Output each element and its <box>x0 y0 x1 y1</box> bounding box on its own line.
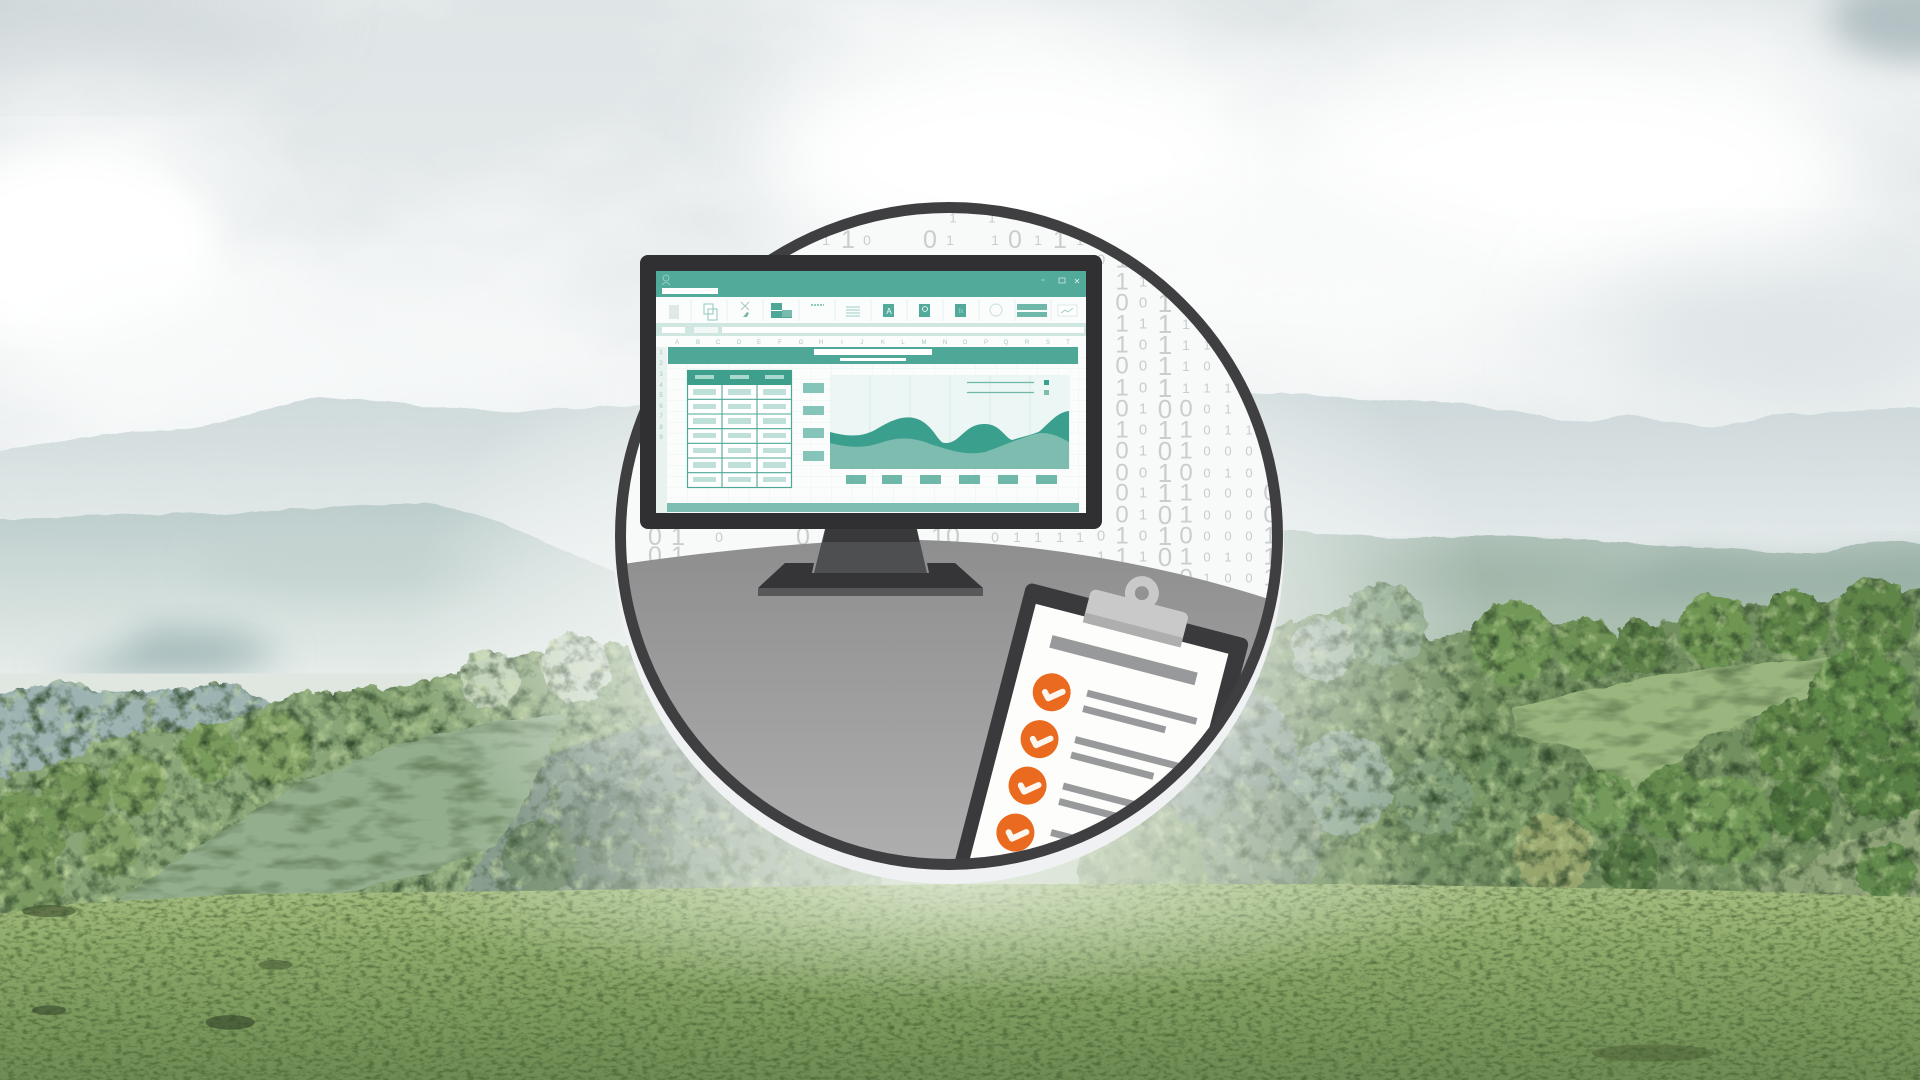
clip <box>1082 576 1188 648</box>
worksheet grid with headers <box>656 340 1086 513</box>
check item 4 <box>996 814 1072 852</box>
illustration circle <box>610 208 1290 949</box>
paper sheet <box>970 604 1228 858</box>
middle distance ridges <box>0 504 1920 686</box>
binary digits backdrop: 001111 <box>715 529 1084 545</box>
worksheet grid with headers: ABCDEFGHIJKLMNOPQRST <box>675 340 1070 346</box>
check item 3 <box>1008 766 1134 818</box>
chart legend <box>967 380 1049 395</box>
binary digits backdrop <box>648 210 1277 592</box>
ribbon toolbar <box>656 297 1086 323</box>
binary digits backdrop: 0101001 <box>648 523 960 570</box>
left hillside with trees <box>0 633 882 920</box>
checklist title bar <box>1049 635 1198 685</box>
forest shading on the ridges <box>0 533 1920 722</box>
ribbon toolbar: fx <box>959 309 963 315</box>
clipboard board <box>955 584 1248 859</box>
binary digits backdrop: 1111101011010 <box>1158 288 1172 572</box>
chart axis labels <box>846 475 1057 484</box>
check item 1 <box>1032 673 1198 734</box>
binary digits backdrop: 1110100010 <box>1224 380 1232 586</box>
binary digits backdrop: 101111 <box>822 232 1084 248</box>
binary digits backdrop: 1111 <box>1182 316 1190 396</box>
footer band <box>667 503 1079 512</box>
ribbon toolbar: A <box>886 307 892 316</box>
white halo ring <box>614 214 1284 884</box>
title bar <box>656 271 1086 297</box>
binary digits backdrop: 10000000 <box>1245 422 1253 586</box>
desk surface <box>627 540 1266 859</box>
circle interior background <box>621 208 1277 864</box>
right foreground trees <box>1342 647 1920 912</box>
data table <box>687 370 792 488</box>
binary digits backdrop: 1001 <box>841 226 1067 254</box>
binary digits backdrop: 011011010 <box>1179 396 1193 592</box>
valley tree band <box>0 681 306 820</box>
monitor stand <box>758 525 983 596</box>
left grassy slope <box>104 713 566 909</box>
computer monitor <box>640 255 1102 596</box>
clipboard with checklist <box>955 576 1248 859</box>
foreground meadow <box>0 768 1920 1080</box>
worksheet grid with headers: 123456789 <box>659 350 663 441</box>
monitor bezel <box>640 255 1102 529</box>
binary digits backdrop: 10100010101101 <box>1139 274 1147 566</box>
hazy band behind the circle <box>735 784 1224 906</box>
formula bar <box>656 323 1086 336</box>
dark circle ring <box>620 208 1278 864</box>
right hillside with trees <box>1078 579 1920 918</box>
binary digits backdrop: 00111 <box>1263 480 1277 592</box>
binary digits backdrop: 101000000001 <box>1203 338 1211 586</box>
mist around the circle <box>410 257 1488 992</box>
binary digits backdrop: 11 <box>949 210 996 226</box>
right grassy slope <box>1512 654 1867 793</box>
binary digits backdrop: 001 <box>1097 252 1105 566</box>
chart row labels <box>803 383 824 461</box>
distant mountains <box>0 387 1920 588</box>
area chart <box>830 375 1070 469</box>
spreadsheet screen <box>656 271 1086 513</box>
binary digits backdrop: 110110101000011 <box>1115 246 1129 570</box>
check item 2 <box>1020 720 1179 780</box>
report header band <box>668 347 1078 364</box>
